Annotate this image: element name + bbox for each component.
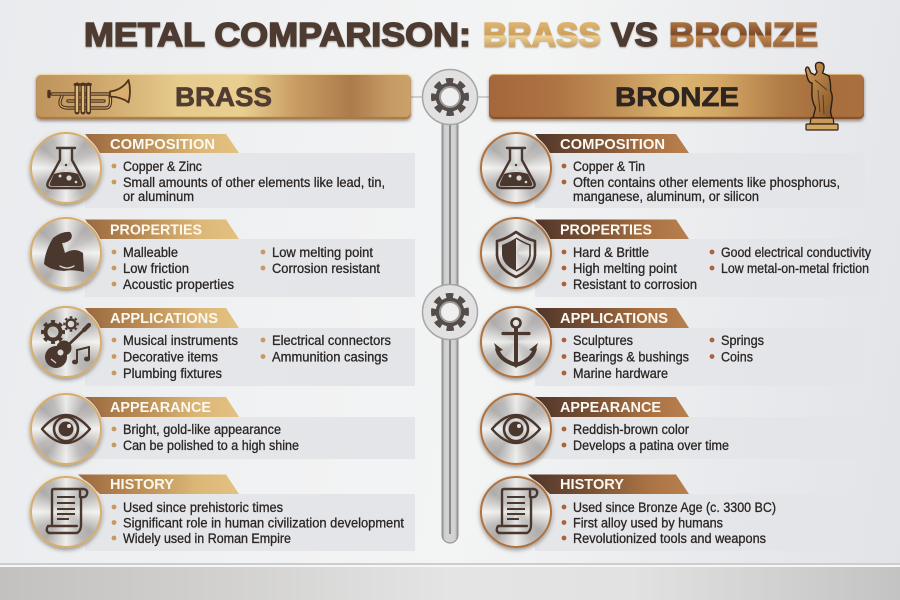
icon: flask	[30, 132, 102, 204]
bullet list: Revolutionized tools and weapons	[573, 531, 766, 546]
icon: anchor	[480, 306, 552, 378]
title: VS	[611, 16, 658, 53]
panel	[535, 153, 865, 208]
ribbon	[535, 308, 689, 328]
bullet list: Musical instruments	[123, 333, 238, 348]
bullet list: Decorative items	[123, 350, 218, 364]
bullet list	[562, 333, 764, 381]
bullet list: Sculptures	[573, 333, 633, 348]
icon: scroll	[30, 476, 102, 548]
ribbon	[85, 397, 239, 417]
ribbon label: HISTORY	[110, 476, 174, 493]
ribbon	[78, 474, 239, 494]
bullet list: Reddish-brown color	[573, 422, 689, 437]
bullet list	[112, 159, 385, 204]
bullet list: Significant role in human civilization development	[123, 516, 404, 530]
bullet list: Plumbing fixtures	[123, 366, 222, 381]
bullet list: First alloy used by humans	[573, 516, 723, 530]
section: bronze history	[477, 474, 776, 553]
section: bronze applications	[477, 305, 764, 386]
ribbon label: APPLICATIONS	[560, 310, 668, 327]
section: bronze composition	[477, 131, 840, 209]
icon: gears, guitar and note	[30, 306, 102, 378]
section: bronze appearance	[477, 392, 729, 470]
section: brass applications	[27, 306, 415, 386]
panel	[85, 328, 415, 386]
icon: trumpet	[47, 79, 131, 114]
section: brass history	[27, 474, 415, 553]
ribbon label: APPLICATIONS	[110, 310, 218, 327]
gear: top	[422, 70, 478, 124]
bullet list: Used since prehistoric times	[123, 500, 283, 515]
panel	[85, 494, 415, 551]
bullet list: Corrosion resistant	[272, 261, 380, 276]
ribbon	[85, 134, 239, 153]
bullet list	[562, 159, 840, 204]
ribbon	[535, 134, 689, 153]
ribbon label: PROPERTIES	[110, 222, 202, 238]
icon: eye	[480, 393, 552, 465]
bullet list: Good electrical conductivity	[721, 245, 871, 260]
panel	[85, 153, 415, 208]
bullet list	[112, 245, 380, 292]
title: BRONZE	[669, 16, 818, 53]
panel	[535, 328, 865, 386]
ribbon	[535, 220, 689, 239]
panel	[535, 494, 865, 551]
bullet list	[562, 500, 776, 546]
panel	[85, 417, 415, 459]
bullet list: Malleable	[123, 245, 178, 260]
bullet list: or aluminum	[123, 189, 194, 204]
bullet list: Acoustic properties	[123, 277, 234, 292]
ribbon label: COMPOSITION	[110, 136, 215, 153]
ribbon	[85, 308, 239, 328]
section: brass properties	[27, 216, 415, 297]
bullet list: Low friction	[123, 261, 189, 276]
banner: bronze	[489, 74, 864, 119]
section: bronze properties	[477, 216, 872, 297]
bullet list: Used since Bronze Age (c. 3300 BC)	[573, 500, 776, 515]
banner: brass	[36, 74, 411, 119]
heading: BRASS: BRASS	[175, 82, 272, 112]
bullet list: Bearings & bushings	[573, 350, 689, 364]
bullet list: Coins	[721, 350, 753, 364]
bullet list: Marine hardware	[573, 366, 668, 381]
title: BRASS	[483, 16, 601, 53]
bullet list: Resistant to corrosion	[573, 277, 697, 292]
panel	[535, 417, 865, 459]
ribbon	[528, 474, 689, 494]
ribbon	[535, 397, 689, 417]
bullet list: Small amounts of other elements like lead, tin,	[123, 175, 385, 190]
ribbon label: HISTORY	[560, 476, 624, 493]
title	[84, 16, 818, 53]
bullet list: Hard & Brittle	[573, 245, 649, 260]
section: brass composition	[27, 132, 415, 209]
ribbon label: COMPOSITION	[560, 136, 665, 153]
center spine with gears	[411, 68, 489, 544]
bullet list: Copper & Tin	[573, 159, 645, 174]
bullet list: Can be polished to a high shine	[123, 438, 299, 453]
bullet list: Widely used in Roman Empire	[123, 531, 291, 546]
bullet list: Low melting point	[272, 245, 373, 260]
heading: BRONZE: BRONZE	[615, 82, 739, 112]
bullet list	[562, 422, 729, 453]
floor band	[0, 563, 900, 600]
icon: eye	[30, 393, 102, 465]
bullet list: manganese, aluminum, or silicon	[573, 189, 759, 204]
ribbon label: APPEARANCE	[110, 399, 211, 416]
panel	[535, 239, 879, 297]
gear: middle	[422, 284, 478, 340]
ribbon label: PROPERTIES	[560, 222, 652, 238]
bullet list	[112, 422, 299, 453]
bullet list	[112, 500, 404, 546]
bullet list: Low metal-on-metal friction	[721, 261, 869, 276]
icon: flask	[480, 132, 552, 204]
bullet list: Copper & Zinc	[123, 159, 202, 174]
bullet list: Ammunition casings	[272, 350, 388, 364]
section: brass appearance	[27, 392, 415, 470]
ribbon	[85, 220, 239, 239]
bullet list: Often contains other elements like phosphorus,	[573, 175, 840, 190]
bullet list: Electrical connectors	[272, 333, 391, 348]
icon: flexed arm	[30, 217, 102, 289]
title: METAL COMPARISON:	[84, 16, 471, 53]
bullet list: Springs	[721, 333, 764, 348]
icon: statue	[804, 62, 839, 131]
bullet list: High melting point	[573, 261, 677, 276]
bullet list: Bright, gold-like appearance	[123, 422, 281, 437]
bullet list	[112, 333, 391, 381]
icon: shield	[480, 217, 552, 289]
icon: scroll	[480, 476, 552, 548]
panel	[85, 239, 415, 297]
bullet list: Develops a patina over time	[573, 438, 729, 453]
ribbon label: APPEARANCE	[560, 399, 661, 416]
bullet list	[562, 245, 871, 292]
